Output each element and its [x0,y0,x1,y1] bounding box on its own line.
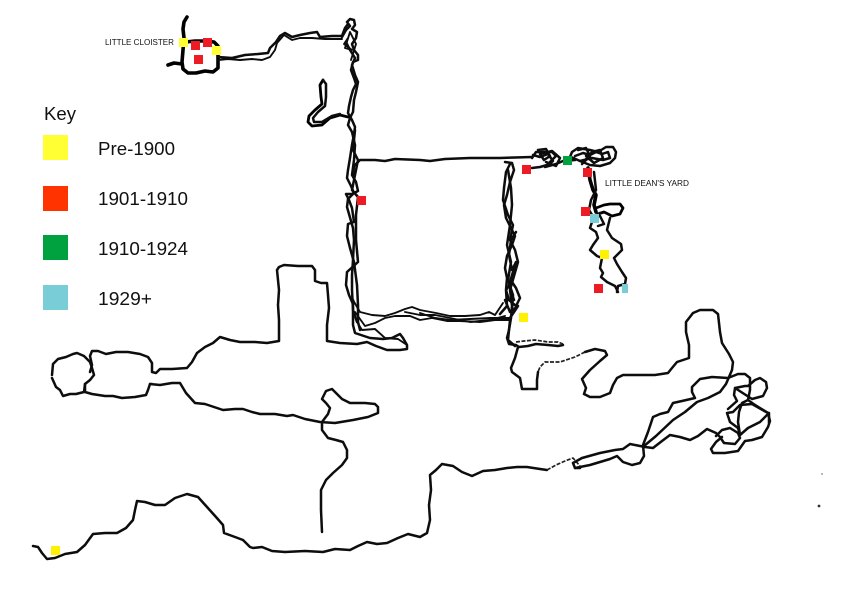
markers: east range and little dean's yard [519,156,628,322]
marker: south-west pre-1900 [51,546,60,555]
route: west range rooms [52,265,407,532]
route: quadrangle north and east sides [353,157,532,346]
label: little cloister: LITTLE CLOISTER [105,37,174,47]
key item: 1901-1910: 1901-1910 [98,188,188,209]
route: north corridor [342,19,360,330]
label: little dean's yard: LITTLE DEAN'S YARD [605,178,689,188]
key item: 1929+: 1929+ [98,288,152,309]
key item: pre-1900: Pre-1900 [98,138,175,159]
route: hook corridor [308,80,348,126]
key [43,103,188,310]
route: little cloister [168,17,218,73]
marker: north corridor 1901-1910 [357,196,366,205]
route: east river walk [511,310,770,468]
key item: 1910-1924: 1910-1924 [98,238,188,259]
route: south end of east range [507,320,563,347]
key item: pre-1900 [43,135,175,160]
map: corridor route traces [33,17,770,559]
markers: little cloister [179,38,221,64]
route: little dean's yard [532,147,626,292]
key item: 1929+ [43,285,152,310]
key item: 1901-1910 [43,186,188,211]
route: quadrangle south side [353,300,510,345]
route: link from cloister to north corridor [218,24,348,60]
stray ink dots [818,473,823,507]
key item: 1910-1924 [43,235,188,260]
route: southern long walk [33,458,580,559]
key heading: Key [44,103,77,124]
